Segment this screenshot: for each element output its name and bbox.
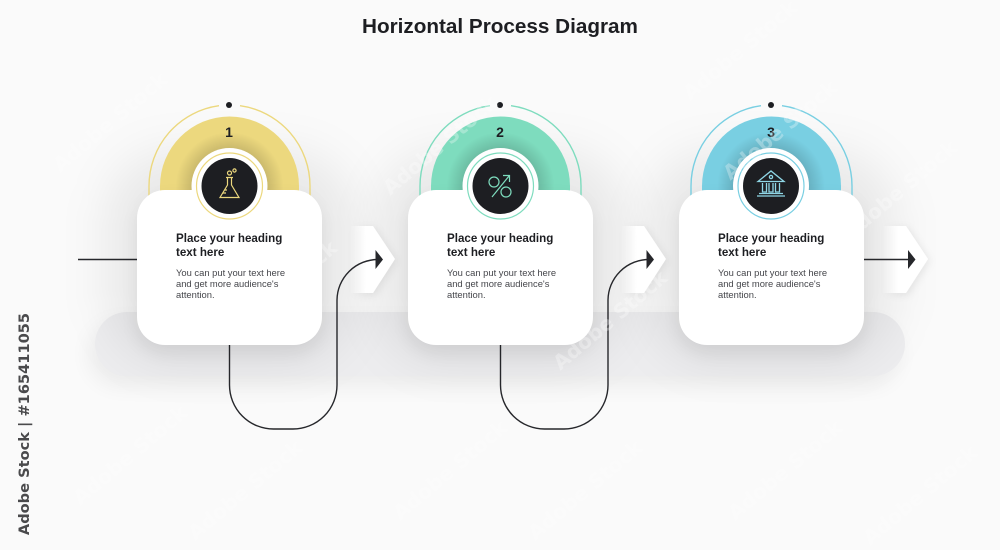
step 3 text xyxy=(718,267,827,300)
step 2 arc xyxy=(420,102,581,240)
step 3 heading: Place your heading xyxy=(718,232,824,245)
soft shadow behind step 3 xyxy=(647,150,897,365)
connector 2 to 3 xyxy=(500,250,654,429)
stock watermark repeats: Adobe Stock xyxy=(218,235,342,345)
chevron arrow 1 xyxy=(350,226,395,293)
connector 1 to 2 xyxy=(230,250,383,429)
step 2 heading: Place your heading xyxy=(447,232,553,245)
stock watermark repeats: Adobe Stock xyxy=(718,75,842,185)
stock watermark repeats: Adobe Stock xyxy=(48,67,172,177)
stock watermark repeats: Adobe Stock xyxy=(378,90,502,200)
title: Horizontal Process Diagram xyxy=(362,15,638,38)
step 1 text: You can put your text here xyxy=(176,267,285,278)
central process bar xyxy=(95,312,905,376)
step 2 text xyxy=(447,267,556,300)
step 3 text: attention. xyxy=(718,289,757,300)
step 2 heading xyxy=(447,232,553,259)
soft shadow behind step 1 xyxy=(105,150,355,365)
step 1 card xyxy=(137,190,322,345)
number 1: 1 xyxy=(225,124,233,140)
stock watermark repeats: Adobe Stock xyxy=(183,435,307,545)
stock watermark repeats: Adobe Stock xyxy=(858,440,982,550)
stock watermark repeats: Adobe Stock xyxy=(523,435,647,545)
number 2: 2 xyxy=(496,124,504,140)
step 1 text: and get more audience's xyxy=(176,278,278,289)
chevron arrow 3 xyxy=(882,226,928,293)
step 1 arc xyxy=(149,102,310,240)
step 2 text: and get more audience's xyxy=(447,278,549,289)
stock watermark repeats: Adobe Stock xyxy=(68,400,192,510)
soft shadow behind step 2 xyxy=(376,150,626,365)
stock id label: Adobe Stock | #165411055 xyxy=(16,313,33,535)
step 1 heading: text here xyxy=(176,246,224,259)
step 1 text: attention. xyxy=(176,289,215,300)
step 1 text xyxy=(176,267,285,300)
stock watermark repeats: Adobe Stock xyxy=(548,265,672,375)
number 3: 3 xyxy=(767,124,775,140)
step 2 card xyxy=(408,190,593,345)
incoming line xyxy=(78,258,137,260)
step 3 heading xyxy=(718,232,824,259)
step 2 text: attention. xyxy=(447,289,486,300)
step 1 heading: Place your heading xyxy=(176,232,282,245)
outgoing arrow xyxy=(863,250,916,269)
stock watermark repeats: Adobe Stock xyxy=(838,135,962,245)
step 2 heading: text here xyxy=(447,246,495,259)
step 3 card xyxy=(679,190,864,345)
step 3 text: and get more audience's xyxy=(718,278,820,289)
icon: bank badge xyxy=(733,148,809,224)
step 1 heading xyxy=(176,232,282,259)
stock watermark repeats: Adobe Stock xyxy=(388,415,512,525)
chevron arrow 2 xyxy=(621,226,666,293)
icon: flask badge xyxy=(192,148,268,224)
step 2 text: You can put your text here xyxy=(447,267,556,278)
step 3 text: You can put your text here xyxy=(718,267,827,278)
stock watermark repeats: Adobe Stock xyxy=(723,415,847,525)
step 3 arc xyxy=(691,102,852,240)
step 3 heading: text here xyxy=(718,246,766,259)
icon: percent arrow badge xyxy=(462,148,538,224)
